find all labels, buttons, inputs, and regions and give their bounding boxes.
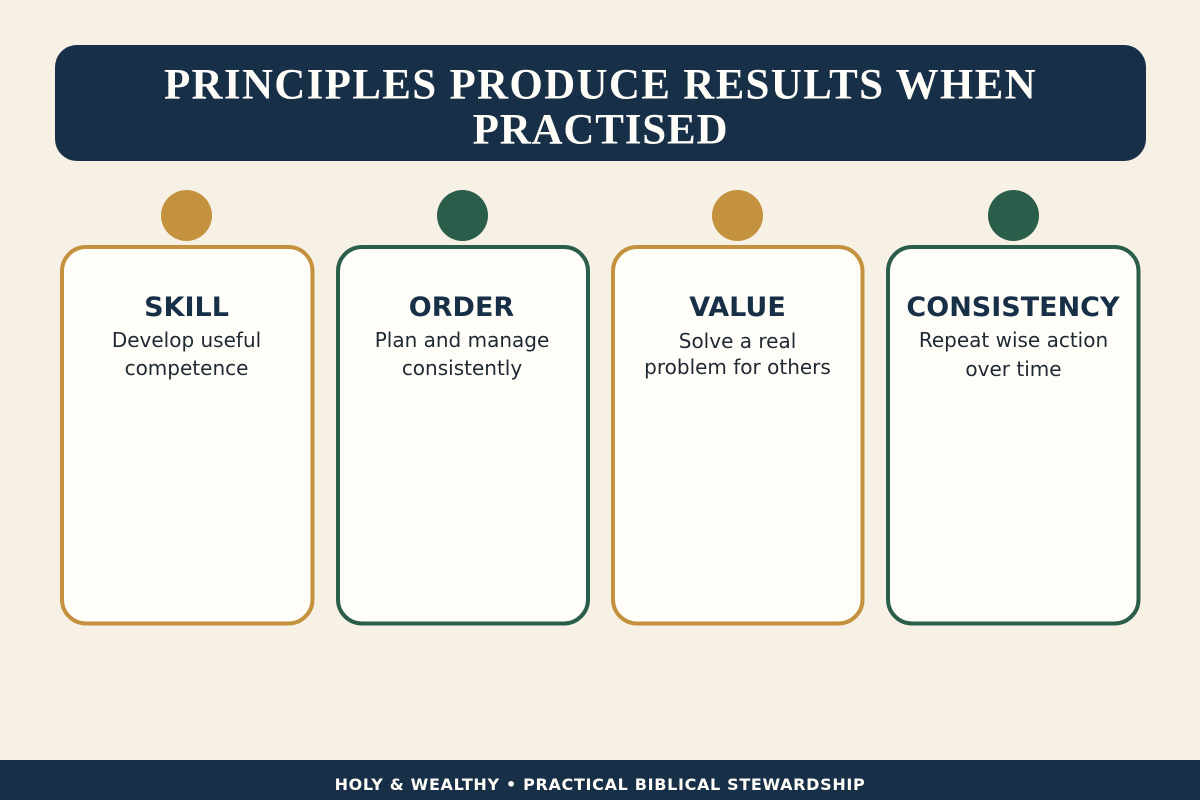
footer [0, 760, 1200, 800]
icon: green circle 2 [437, 190, 488, 241]
icon: gold circle 3 [712, 190, 763, 241]
text: skill description: Develop useful [112, 328, 261, 352]
heading: order: ORDER [409, 292, 514, 323]
heading: value: VALUE [689, 292, 786, 323]
text: value description: problem for others [644, 355, 831, 379]
text: order description: Plan and manage [375, 328, 549, 352]
text: consistency description: over time [965, 357, 1062, 381]
footer text: HOLY & WEALTHY • PRACTICAL BIBLICAL STEWARDSHIP [335, 775, 865, 794]
icon: gold circle 1 [161, 190, 212, 241]
panel: consistency [888, 247, 1138, 624]
icon: green circle 4 [988, 190, 1039, 241]
title: PRACTISED [473, 106, 728, 154]
text: order description: consistently [402, 356, 522, 380]
text: consistency description: Repeat wise action [919, 328, 1108, 352]
text: value description: Solve a real [679, 329, 796, 353]
panel: order [338, 247, 588, 624]
panel: skill [62, 247, 312, 624]
title: PRINCIPLES PRODUCE RESULTS WHEN [164, 62, 1037, 108]
title banner [55, 45, 1146, 161]
heading: consistency: CONSISTENCY [906, 292, 1120, 323]
panel: value [613, 247, 862, 624]
text: skill description: competence [125, 356, 248, 380]
heading: skill: SKILL [144, 292, 229, 323]
